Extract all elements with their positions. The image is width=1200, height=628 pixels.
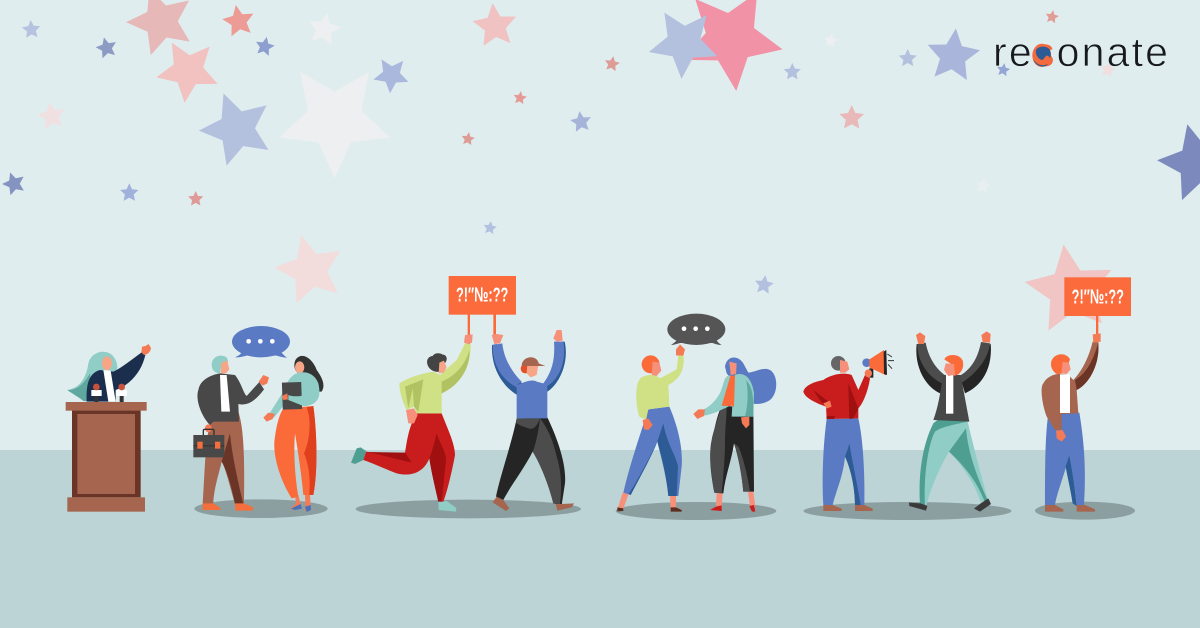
woman sweater arm (288, 388, 319, 406)
trousers (823, 418, 864, 506)
pole (1096, 315, 1098, 350)
man trousers (203, 412, 244, 505)
speaker hand (141, 344, 151, 355)
podium body (72, 410, 141, 497)
shirt (946, 375, 953, 414)
brown jacket (1042, 342, 1099, 430)
red shirt (803, 374, 870, 419)
right woman pants (710, 406, 754, 493)
woman shoes and feet (291, 495, 311, 511)
blue trousers (1045, 413, 1085, 506)
man trousers shade (222, 433, 243, 504)
podium panel (77, 414, 135, 494)
man in cap arms shade (492, 342, 566, 395)
right woman pants highlight (710, 406, 750, 493)
protest sign: ?!″№:?? (1072, 285, 1124, 308)
protest sign (449, 276, 516, 315)
man in cap sweater (493, 342, 564, 418)
hands (1056, 333, 1101, 442)
shirt (1060, 374, 1070, 413)
conversation pair (616, 314, 776, 520)
trousers shade (1066, 455, 1077, 506)
trousers shade (845, 443, 861, 505)
teal trousers shade (920, 414, 988, 505)
runner sweater (399, 342, 471, 413)
face (944, 363, 955, 376)
woman hands (263, 393, 288, 422)
woman pants (274, 406, 316, 498)
man with megaphone shadow (804, 502, 1012, 520)
runner hair (427, 353, 447, 372)
runner hands (406, 334, 473, 423)
right woman hands (693, 409, 749, 428)
folder (282, 382, 302, 410)
speech bubble (667, 314, 725, 345)
man in cap trousers highlight (516, 418, 561, 504)
man in cap face (527, 363, 538, 377)
man in cap shoes (493, 497, 574, 511)
briefcase (193, 429, 224, 457)
speech bubble (232, 326, 290, 358)
man with sign (1035, 277, 1135, 520)
left woman legs and shoes (617, 493, 682, 511)
runner front shoe (438, 501, 456, 512)
man in cap hair (521, 364, 530, 373)
ground (0, 450, 1200, 628)
right woman face (729, 362, 737, 375)
runner sweater shade (405, 350, 469, 412)
man jacket (197, 373, 264, 425)
speaker hair (67, 352, 117, 402)
hip hand (823, 401, 832, 409)
right woman top (722, 375, 737, 407)
speaker shirt (103, 370, 116, 402)
resonate logo: resonate (993, 29, 1170, 75)
runner trousers shade (368, 433, 446, 502)
man face (221, 361, 229, 373)
left woman hands (643, 344, 685, 430)
left woman sweater (636, 355, 684, 420)
shirt shade (813, 383, 858, 419)
man with megaphone (803, 350, 887, 511)
cheering man (887, 331, 991, 512)
sky background (0, 0, 1200, 450)
shoes (1045, 505, 1095, 512)
right woman hair (725, 357, 776, 404)
man hair (212, 356, 228, 373)
protest sign (1064, 277, 1131, 316)
shoes (909, 498, 991, 512)
talking couple (193, 326, 328, 518)
sound lines (887, 354, 894, 369)
megaphone (862, 350, 887, 378)
ground shadow (1035, 502, 1135, 520)
speaker hair shade (67, 373, 92, 402)
speaker jacket (87, 352, 145, 402)
podium top (66, 402, 147, 411)
hair (831, 356, 846, 371)
microphones (91, 384, 127, 402)
left woman pants shade (629, 423, 678, 496)
right woman cardigan (703, 374, 754, 417)
sign poles (468, 313, 496, 352)
man hand holding case (205, 424, 212, 432)
woman pants shade (304, 406, 316, 495)
man shoes (203, 503, 253, 511)
sign holders group (351, 276, 581, 518)
ground shadow (356, 500, 581, 518)
jacket arms shade (916, 343, 991, 394)
man in cap cap (522, 357, 545, 366)
teal trousers (920, 414, 988, 505)
runner face (439, 361, 447, 373)
woman hair (294, 356, 323, 392)
left woman pants (623, 407, 682, 496)
runner back shoe (351, 447, 366, 464)
left woman hair (642, 355, 660, 373)
woman sweater (270, 372, 319, 417)
left woman face (652, 362, 661, 376)
ground shadow (194, 499, 328, 518)
man hand (259, 375, 269, 386)
right woman legs and shoes (716, 492, 755, 507)
runner trousers (363, 413, 455, 502)
ground shadow (616, 502, 776, 520)
woman face (295, 361, 304, 373)
hair (1051, 354, 1070, 374)
hair (944, 355, 963, 376)
face (840, 360, 849, 373)
right woman cardigan shade (745, 380, 753, 417)
hands (916, 331, 991, 344)
jacket (933, 375, 969, 422)
star field (0, 0, 1200, 333)
shoes (823, 505, 873, 511)
jacket arms (917, 342, 990, 384)
jacket shade (1075, 343, 1099, 390)
man in cap hands (492, 330, 563, 344)
face (1061, 362, 1071, 374)
podium speaker (66, 344, 151, 512)
man shirt (220, 375, 230, 412)
protest sign: ?!″№:?? (456, 284, 508, 307)
man in cap trousers (496, 417, 565, 505)
podium base (67, 497, 145, 512)
speaker face (102, 356, 112, 370)
